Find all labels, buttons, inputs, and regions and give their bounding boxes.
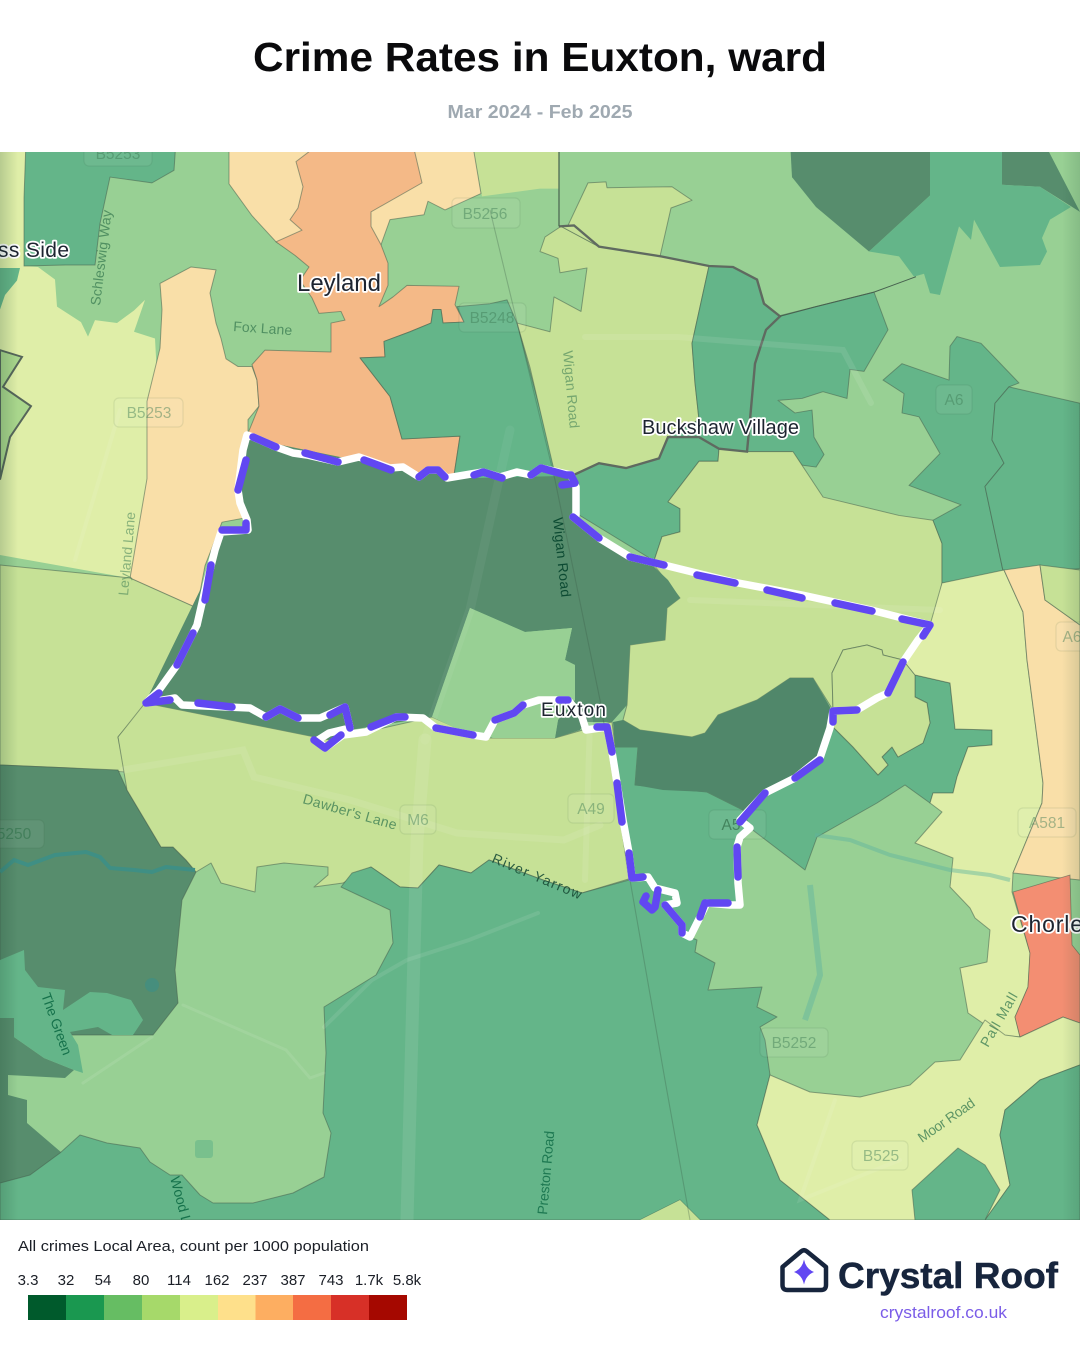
road name labels: Preston Road — [534, 1130, 557, 1215]
road shields: B5252 — [772, 1035, 816, 1052]
legend tick labels: 54 — [95, 1272, 111, 1289]
legend tick labels — [18, 1272, 422, 1289]
road shields: B525 — [863, 1148, 899, 1165]
road shields: A49 — [577, 801, 605, 818]
logo wordmark: Crystal Roof — [838, 1255, 1059, 1296]
road shields: B5253 — [96, 146, 140, 163]
boundary: purple dashes — [146, 437, 930, 933]
road name labels: Fox Lane — [233, 318, 293, 338]
legend tick labels: 80 — [133, 1272, 149, 1289]
road name labels: Dawber's Lane — [301, 791, 399, 833]
Buckshaw parish boundary — [559, 225, 780, 475]
legend tick labels: 114 — [167, 1272, 191, 1289]
boundary: white line — [146, 435, 930, 937]
southern neighbourhood areas — [0, 565, 205, 772]
place labels: Euxton — [541, 700, 606, 721]
legend tick labels: 5.8k — [393, 1272, 422, 1289]
road name labels: Wigan Road — [560, 350, 583, 429]
road name labels: The Green — [38, 991, 75, 1057]
road name labels: River Yarrow — [490, 850, 585, 903]
logo url: crystalroof.co.uk — [880, 1304, 1008, 1322]
place labels — [0, 239, 1080, 937]
Euxton ward interior areas — [145, 438, 680, 740]
place labels: Leyland — [297, 270, 381, 297]
road shields: B5253 — [127, 405, 171, 422]
road shields — [0, 138, 1080, 1170]
road name labels — [38, 209, 1021, 1225]
road name labels: Wood L — [167, 1175, 195, 1225]
road shields: M6 — [407, 812, 429, 829]
icon: house with star — [782, 1250, 826, 1290]
place labels: ss Side — [0, 239, 69, 262]
road shields: B5256 — [463, 206, 507, 223]
legend tick labels: 162 — [204, 1272, 230, 1289]
northern neighbourhood areas — [0, 140, 1080, 643]
legend title: All crimes Local Area, count per 1000 population — [18, 1238, 369, 1255]
road shields: A6 — [945, 392, 963, 409]
Euxton ward boundary — [146, 435, 930, 937]
road name labels: Wigan Road — [550, 517, 574, 598]
legend — [18, 1238, 422, 1320]
legend colour scale — [28, 1295, 407, 1320]
road shields: A5 — [722, 817, 740, 834]
road name labels: Moor Road — [915, 1094, 978, 1145]
legend tick labels: 743 — [318, 1272, 344, 1289]
legend tick labels: 237 — [242, 1272, 268, 1289]
legend tick labels: 387 — [280, 1272, 306, 1289]
title: Crime Rates in Euxton, ward — [253, 34, 827, 80]
legend tick labels: 3.3 — [18, 1272, 38, 1289]
roads and rivers — [75, 337, 940, 1220]
road shields: A581 — [1029, 815, 1065, 832]
road name labels: Pall Mall — [977, 990, 1021, 1050]
place labels: Buckshaw Village — [642, 417, 799, 439]
subtitle: date range: Mar 2024 - Feb 2025 — [448, 101, 632, 122]
road name labels: Leyland Lane — [115, 511, 138, 596]
legend tick labels: 32 — [58, 1272, 74, 1289]
logo: Crystal Roof — [782, 1250, 1059, 1322]
legend tick labels: 1.7k — [355, 1272, 384, 1289]
map edge fade — [0, 152, 15, 1220]
road shields: B5248 — [470, 310, 514, 327]
road name labels: Schleswig Way — [87, 209, 115, 306]
